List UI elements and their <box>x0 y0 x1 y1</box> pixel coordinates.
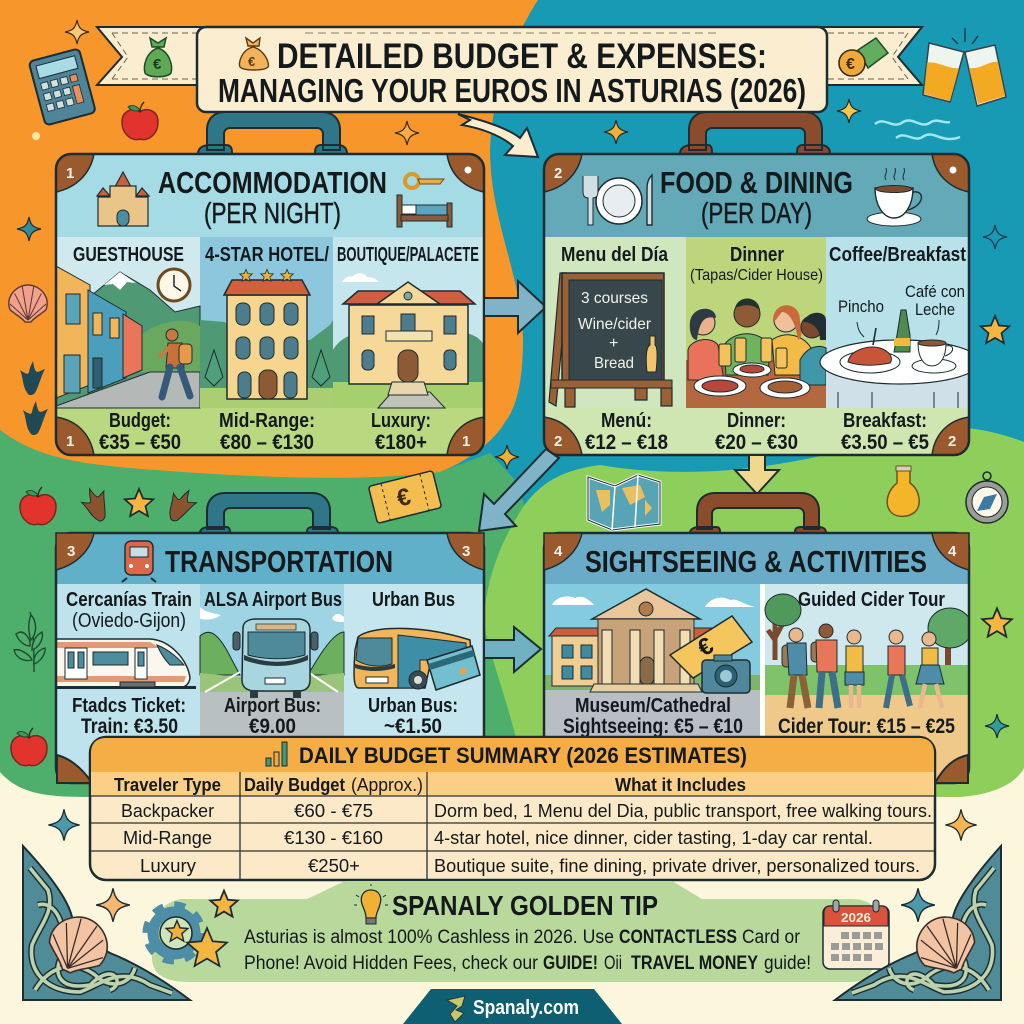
panel: accommodation: 1 <box>66 165 74 182</box>
scene: airport bus <box>200 607 344 698</box>
icon: star right <box>981 316 1009 343</box>
corner: top right <box>932 154 969 192</box>
icon: key <box>405 174 444 188</box>
price: breakfast: €3.50 – €5 <box>841 431 929 454</box>
icon: star green <box>125 489 153 516</box>
row: luxury: Boutique suite, fine dining, private driver, personalized tours. <box>434 855 920 876</box>
title banner <box>97 27 922 112</box>
icon: sparkle teal table <box>48 809 80 841</box>
header row: Daily Budget <box>244 775 345 795</box>
icon: gear with stars <box>146 891 238 966</box>
icon: euro ticket <box>670 616 752 678</box>
header row <box>114 775 746 795</box>
icon: euro ticket <box>368 471 442 523</box>
price: dinner: Dinner: <box>727 410 786 432</box>
icon: apple bottom <box>11 728 47 766</box>
price: train ticket <box>72 695 186 738</box>
icon: pink shell <box>9 285 47 322</box>
icon: footprint <box>20 361 45 395</box>
label: alsa airport bus: ALSA Airport Bus <box>204 589 342 611</box>
icon: orange money bag <box>239 38 268 70</box>
row: mid-range <box>123 827 873 848</box>
tip text line 2 <box>244 953 811 974</box>
row: luxury: €250+ <box>308 855 360 876</box>
price: mid-range: Mid-Range: <box>219 410 315 432</box>
label: cafe con leche <box>906 285 964 315</box>
corner: bottom left <box>56 417 94 455</box>
scene: urban bus and card <box>354 628 480 690</box>
scene: cider tour group <box>765 594 972 708</box>
icon: logo emblem <box>447 996 465 1022</box>
price: train ticket: Train: €3.50 <box>81 715 178 738</box>
icon: footprint <box>23 401 48 435</box>
corner: top right <box>447 154 484 192</box>
table title band <box>91 738 934 772</box>
icon: compass <box>966 472 1008 523</box>
suitcase body <box>544 154 980 455</box>
scene: hotel <box>200 269 333 408</box>
heading: sightseeing and activities: SIGHTSEEING & ACTIVITIES <box>585 544 927 579</box>
scene: guesthouse street <box>56 266 200 408</box>
panel: food and dining: 2 <box>554 433 562 450</box>
label: urban bus: Urban Bus <box>372 589 455 611</box>
row: backpacker: Dorm bed, 1 Menu del Dia, public transport, free walking tours. <box>434 800 932 821</box>
price: luxury: Luxury: <box>371 410 431 432</box>
panel: budget summary table <box>90 737 935 880</box>
icon: brown footprint <box>78 484 115 525</box>
icon: calendar 2026: 2026 <box>841 910 871 925</box>
title line 2: MANAGING YOUR EUROS IN ASTURIAS (2026) <box>218 72 806 109</box>
tip text line 2: GUIDE! <box>543 953 598 974</box>
panel: golden tip <box>152 881 875 982</box>
scene: chalkboard: + <box>609 335 618 352</box>
icon: sparkle mid <box>495 445 519 469</box>
icon: sparkle teal bg <box>604 120 628 144</box>
label: dinner: Dinner <box>730 244 784 266</box>
icon: star lower right <box>982 608 1012 637</box>
icon: castle <box>97 172 149 226</box>
panel: food and dining: 2 <box>554 165 562 182</box>
arrow: transportation to sightseeing <box>484 627 541 672</box>
row: backpacker: Backpacker <box>121 800 214 821</box>
tip text line 1: CONTACTLESS <box>619 927 737 948</box>
price: menu: Menú: <box>601 410 652 432</box>
tip text line 2: Phone! Avoid Hidden Fees, check our <box>244 953 539 974</box>
price: mid-range <box>219 410 315 454</box>
decoration: dot <box>32 132 40 140</box>
row: backpacker <box>121 800 932 821</box>
label: boutique: BOUTIQUE/PALACETE <box>337 244 479 266</box>
icon: sparkle outline right <box>983 225 1007 249</box>
panel: sightseeing: 4 <box>554 543 563 560</box>
price: breakfast <box>841 410 929 454</box>
icon: coin and banknote: € <box>846 56 855 73</box>
icon: sparkle orange bottom <box>96 888 130 922</box>
icon: lightbulb <box>354 884 388 924</box>
icon: bar chart <box>266 742 287 766</box>
tip background <box>152 881 875 982</box>
price: museum: Museum/Cathedral <box>575 695 731 717</box>
label: dinner <box>690 244 823 284</box>
icon: clock <box>158 269 190 301</box>
header row: Traveler Type <box>114 775 221 795</box>
subheading: per night: (PER NIGHT) <box>204 198 341 230</box>
row: backpacker: €60 - €75 <box>294 800 373 821</box>
row: mid-range: €130 - €160 <box>284 827 383 848</box>
label: guided cider tour: Guided Cider Tour <box>798 589 945 611</box>
price: cider tour: Cider Tour: €15 – €25 <box>778 715 955 738</box>
panel: transportation: 3 <box>462 543 470 560</box>
suitcase handle <box>200 493 338 533</box>
arrow: food to transportation <box>479 449 559 531</box>
price: airport bus: €9.00 <box>249 715 296 738</box>
icon: sparkle teal bottom <box>901 888 935 922</box>
corner: bottom left <box>57 755 92 783</box>
icon: calculator <box>29 48 96 126</box>
label: pincho: Pincho <box>838 297 884 316</box>
price: airport bus: Airport Bus: <box>224 695 321 717</box>
ornament: left celtic corner <box>23 846 190 1000</box>
scene: chalkboard: Bread <box>594 355 634 372</box>
heading: transportation: TRANSPORTATION <box>165 544 393 579</box>
corner: top left <box>544 533 582 570</box>
heading: food and dining: FOOD & DINING <box>660 165 853 200</box>
icon: waves <box>875 120 960 139</box>
suitcase handle <box>690 493 826 533</box>
subheading: per day: (PER DAY) <box>701 198 812 230</box>
suitcase handle <box>680 112 830 154</box>
label: cercanias train <box>66 589 192 632</box>
icon: cider glasses <box>923 28 1006 106</box>
column header band <box>91 772 934 796</box>
scene: museum <box>549 589 755 692</box>
tip text line 2: Oii <box>604 953 622 974</box>
suitcase body <box>544 533 972 783</box>
footer badge <box>403 989 622 1024</box>
price: urban bus <box>368 695 458 738</box>
label: dinner: (Tapas/Cider House) <box>690 267 823 284</box>
row: mid-range: Mid-Range <box>123 827 212 848</box>
price: urban bus: Urban Bus: <box>368 695 458 717</box>
icon: green money bag: € <box>153 56 162 73</box>
icon: sparkle teal lower <box>985 714 1009 738</box>
price: airport bus <box>224 695 321 738</box>
price: urban bus: ~€1.50 <box>384 715 442 738</box>
price: budget: €35 – €50 <box>99 431 181 454</box>
label: menu del dia: Menu del Día <box>561 244 669 266</box>
price: museum: Sightseeing: €5 – €10 <box>563 715 743 738</box>
arrow: title to food panel <box>458 114 538 157</box>
suitcase body <box>56 533 484 783</box>
scene: breakfast table <box>820 282 980 408</box>
tip text line 2: guide! <box>764 953 811 974</box>
chalk text: 3 courses <box>581 290 648 307</box>
price: museum <box>563 695 743 738</box>
label: cafe con leche: Leche <box>915 300 955 319</box>
icon: coffee cup <box>867 168 921 226</box>
table body <box>90 737 935 880</box>
corner: top right <box>447 533 484 570</box>
icon: sparkle top left <box>65 20 89 44</box>
row: luxury <box>140 855 920 876</box>
icon: calendar 2026 <box>823 900 889 969</box>
icon: train <box>122 541 156 582</box>
heading: accommodation: ACCOMMODATION <box>158 165 387 200</box>
tip heading: SPANALY GOLDEN TIP <box>392 890 658 921</box>
header row: What it Includes <box>615 775 746 795</box>
panel: accommodation: 1 <box>66 433 74 450</box>
price: train ticket: Ftadcs Ticket: <box>72 695 186 717</box>
table title: DAILY BUDGET SUMMARY (2026 ESTIMATES) <box>299 743 747 768</box>
price: breakfast: Breakfast: <box>843 410 927 432</box>
icon: camera <box>702 655 750 693</box>
price: menu <box>585 410 668 454</box>
price: budget <box>99 410 181 454</box>
label: coffee and breakfast: Coffee/Breakfast <box>829 244 966 266</box>
scene: train <box>56 639 196 689</box>
price: budget: Budget: <box>109 410 171 432</box>
suitcase body <box>56 154 484 455</box>
corner: bottom left <box>544 417 582 455</box>
panel: food and dining: 2 <box>948 433 956 450</box>
icon: coin and banknote <box>839 38 888 76</box>
icon: sparkle yellow <box>837 99 861 123</box>
icon: map <box>588 475 660 530</box>
row: mid-range: 4-star hotel, nice dinner, cider tasting, 1-day car rental. <box>434 827 873 848</box>
price: dinner: €20 – €30 <box>715 431 798 454</box>
icon: brown footprint <box>163 485 200 526</box>
arrow: accommodation to food <box>484 281 546 333</box>
icon: leaf sprig <box>14 612 45 672</box>
price: mid-range: €80 – €130 <box>220 431 314 454</box>
corner: top left <box>56 533 94 570</box>
tip text line 1: Card or <box>742 927 801 948</box>
panel: transportation: 3 <box>67 543 75 560</box>
icon: euro ticket: € <box>394 483 414 513</box>
tip text line 2: TRAVEL MONEY <box>631 953 758 974</box>
table grid <box>91 772 934 880</box>
icon: plate and cutlery <box>583 175 652 225</box>
title line 1: DETAILED BUDGET & EXPENSES: <box>277 37 767 76</box>
icon: apple top <box>122 102 158 140</box>
panel: sightseeing: 4 <box>948 543 957 560</box>
corner: bottom right <box>932 417 969 455</box>
corner: bottom right <box>447 417 484 455</box>
icon: apple left <box>20 487 56 525</box>
ornament: right celtic corner <box>835 846 1001 1000</box>
hiker <box>159 329 192 397</box>
website: Spanaly.com <box>473 997 579 1019</box>
icon: green money bag <box>144 38 172 77</box>
label: guesthouse: GUESTHOUSE <box>73 244 184 266</box>
icon: sparkle teal left <box>17 217 41 241</box>
title plate <box>197 27 827 112</box>
icon: bed <box>397 195 452 227</box>
corner: top left <box>56 154 94 192</box>
price: luxury: €180+ <box>375 431 427 454</box>
label: 4-star hotel: 4-STAR HOTEL/ <box>205 244 329 266</box>
icon: oil flask <box>887 466 919 516</box>
tip text line 1: Asturias is almost 100% Cashless in 2026. Use <box>244 927 614 948</box>
icon: sparkle orange table <box>945 809 977 841</box>
row: luxury: Luxury <box>140 855 197 876</box>
label: cafe con leche: Café con <box>905 282 965 301</box>
price: dinner <box>715 410 798 454</box>
icon: orange money bag: € <box>248 54 255 69</box>
price: menu: €12 – €18 <box>585 431 668 454</box>
corner: top left <box>544 154 582 192</box>
panel: accommodation: 1 <box>462 433 470 450</box>
header row: (Approx.) <box>351 775 423 795</box>
scene: palacete <box>333 273 484 408</box>
scene: chalkboard <box>549 273 672 407</box>
icon: sparkle orange <box>395 121 419 145</box>
suitcase handle <box>198 112 347 154</box>
arrow: food to sightseeing <box>735 455 779 494</box>
left ribbon <box>97 27 205 85</box>
scene: chalkboard: Wine/cider <box>578 316 652 333</box>
label: cercanias train: Cercanías Train <box>66 589 192 611</box>
price: luxury <box>371 410 431 454</box>
icon: euro ticket: € <box>693 632 718 662</box>
scene: dinner group <box>686 298 826 408</box>
corner: bottom right <box>935 755 968 783</box>
right ribbon <box>820 27 922 85</box>
label: cercanias train: (Oviedo-Gijon) <box>72 610 186 632</box>
corner: top right <box>932 533 969 570</box>
